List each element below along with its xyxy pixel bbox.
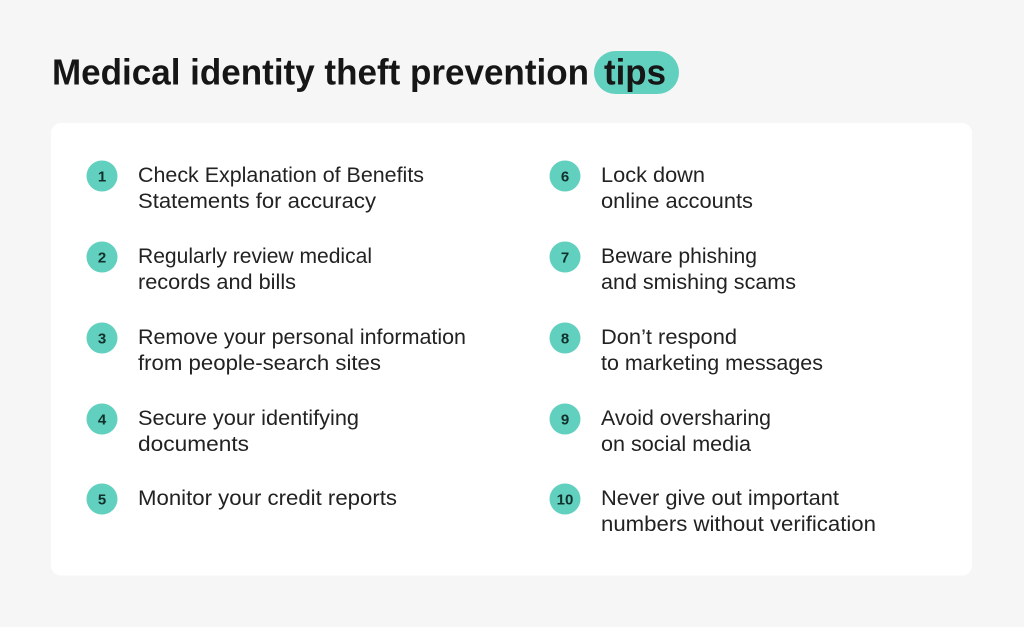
tip 3: from people-search sites <box>138 352 381 375</box>
tip 1: Statements for accuracy <box>138 190 377 213</box>
tip 6: Lock down <box>601 164 705 187</box>
tip 5 <box>86 484 397 514</box>
tip 2: Regularly review medical <box>138 245 372 268</box>
tip 2: records and bills <box>138 271 296 294</box>
tip 8 <box>550 322 823 375</box>
tip 2 <box>86 242 372 294</box>
tip 3: Remove your personal information <box>138 326 466 349</box>
tip 10: numbers without verification <box>601 513 876 536</box>
tip 5: Monitor your credit reports <box>138 487 397 510</box>
tip 7 <box>550 242 796 294</box>
tip 3 <box>86 322 466 375</box>
tip 3: 3 <box>98 330 106 348</box>
tip 5: 5 <box>98 492 106 508</box>
title text: Medical identity theft prevention <box>52 52 589 92</box>
tip 9 <box>550 404 771 456</box>
title pill highlight <box>594 51 679 94</box>
tip 2: 2 <box>98 250 106 266</box>
tip 6: 6 <box>561 168 569 186</box>
tip 7: and smishing scams <box>601 271 796 294</box>
tip 7: Beware phishing <box>601 245 757 268</box>
panel: tips card <box>51 123 972 576</box>
tip 1: 1 <box>98 168 106 186</box>
tip 1 <box>86 160 424 213</box>
tip 8: 8 <box>561 330 569 348</box>
tip 6: online accounts <box>601 190 753 213</box>
tip 4: documents <box>138 433 249 456</box>
tip 8: Don’t respond <box>601 326 737 349</box>
tip 10: 10 <box>557 492 573 508</box>
tip 7: 7 <box>561 250 569 266</box>
title word: tips: tips <box>604 52 666 92</box>
tip 9: on social media <box>601 433 751 456</box>
tip 9: Avoid oversharing <box>601 407 771 430</box>
tip 10: Never give out important <box>601 487 839 510</box>
tip 6 <box>550 160 753 213</box>
tip 10 <box>550 484 876 536</box>
tip 4: 4 <box>98 412 107 428</box>
title <box>52 51 679 94</box>
tip 4 <box>86 404 359 456</box>
tip 1: Check Explanation of Benefits <box>138 164 424 187</box>
tip 4: Secure your identifying <box>138 407 359 430</box>
tip 8: to marketing messages <box>601 352 823 375</box>
tip 9: 9 <box>561 412 569 428</box>
